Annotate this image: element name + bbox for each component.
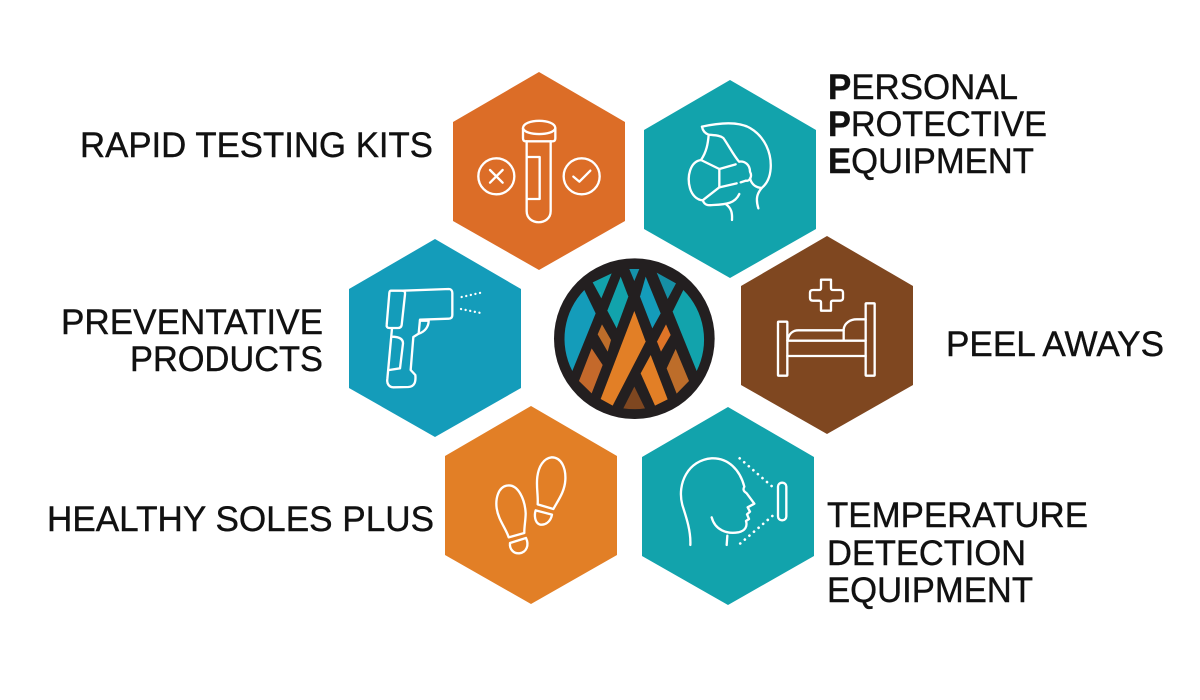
heading: preventative products: PRODUCTS	[130, 340, 323, 379]
icon: hospital bed with cross	[778, 280, 875, 376]
icon: infrared thermometer	[387, 289, 484, 387]
heading: preventative products	[61, 303, 323, 379]
hexagon: peel aways	[741, 236, 913, 434]
heading: temperature detection equipment: TEMPERATURE	[827, 496, 1088, 535]
heading: peel aways: PEEL AWAYS	[946, 325, 1164, 364]
icon: shoe prints	[496, 457, 565, 553]
heading: personal protective equipment: PROTECTIVE	[828, 105, 1047, 144]
heading: personal protective equipment: PERSONAL	[828, 68, 1018, 107]
heading: personal protective equipment	[828, 68, 1047, 181]
hexagon: rapid testing kits	[453, 72, 625, 270]
heading: temperature detection equipment	[827, 496, 1088, 610]
heading: temperature detection equipment: DETECTION	[827, 534, 1026, 573]
heading: personal protective equipment: EQUIPMENT	[828, 142, 1034, 181]
hexagon: personal protective equipment	[644, 80, 816, 278]
heading: temperature detection equipment: EQUIPMENT	[827, 571, 1033, 610]
heading: rapid testing kits: RAPID TESTING KITS	[80, 126, 433, 165]
hexagon: healthy soles plus	[445, 406, 617, 604]
icon: head profile with temperature sensor	[681, 458, 786, 545]
hexagon: temperature detection equipment	[642, 407, 814, 605]
heading: preventative products: PREVENTATIVE	[61, 303, 323, 342]
icon: head with face mask	[689, 123, 771, 220]
hexagon: preventative products	[349, 239, 521, 437]
logo: mountain emblem	[554, 258, 715, 419]
icon: test tube with cross and check	[478, 121, 600, 222]
heading: healthy soles plus: HEALTHY SOLES PLUS	[47, 500, 434, 539]
